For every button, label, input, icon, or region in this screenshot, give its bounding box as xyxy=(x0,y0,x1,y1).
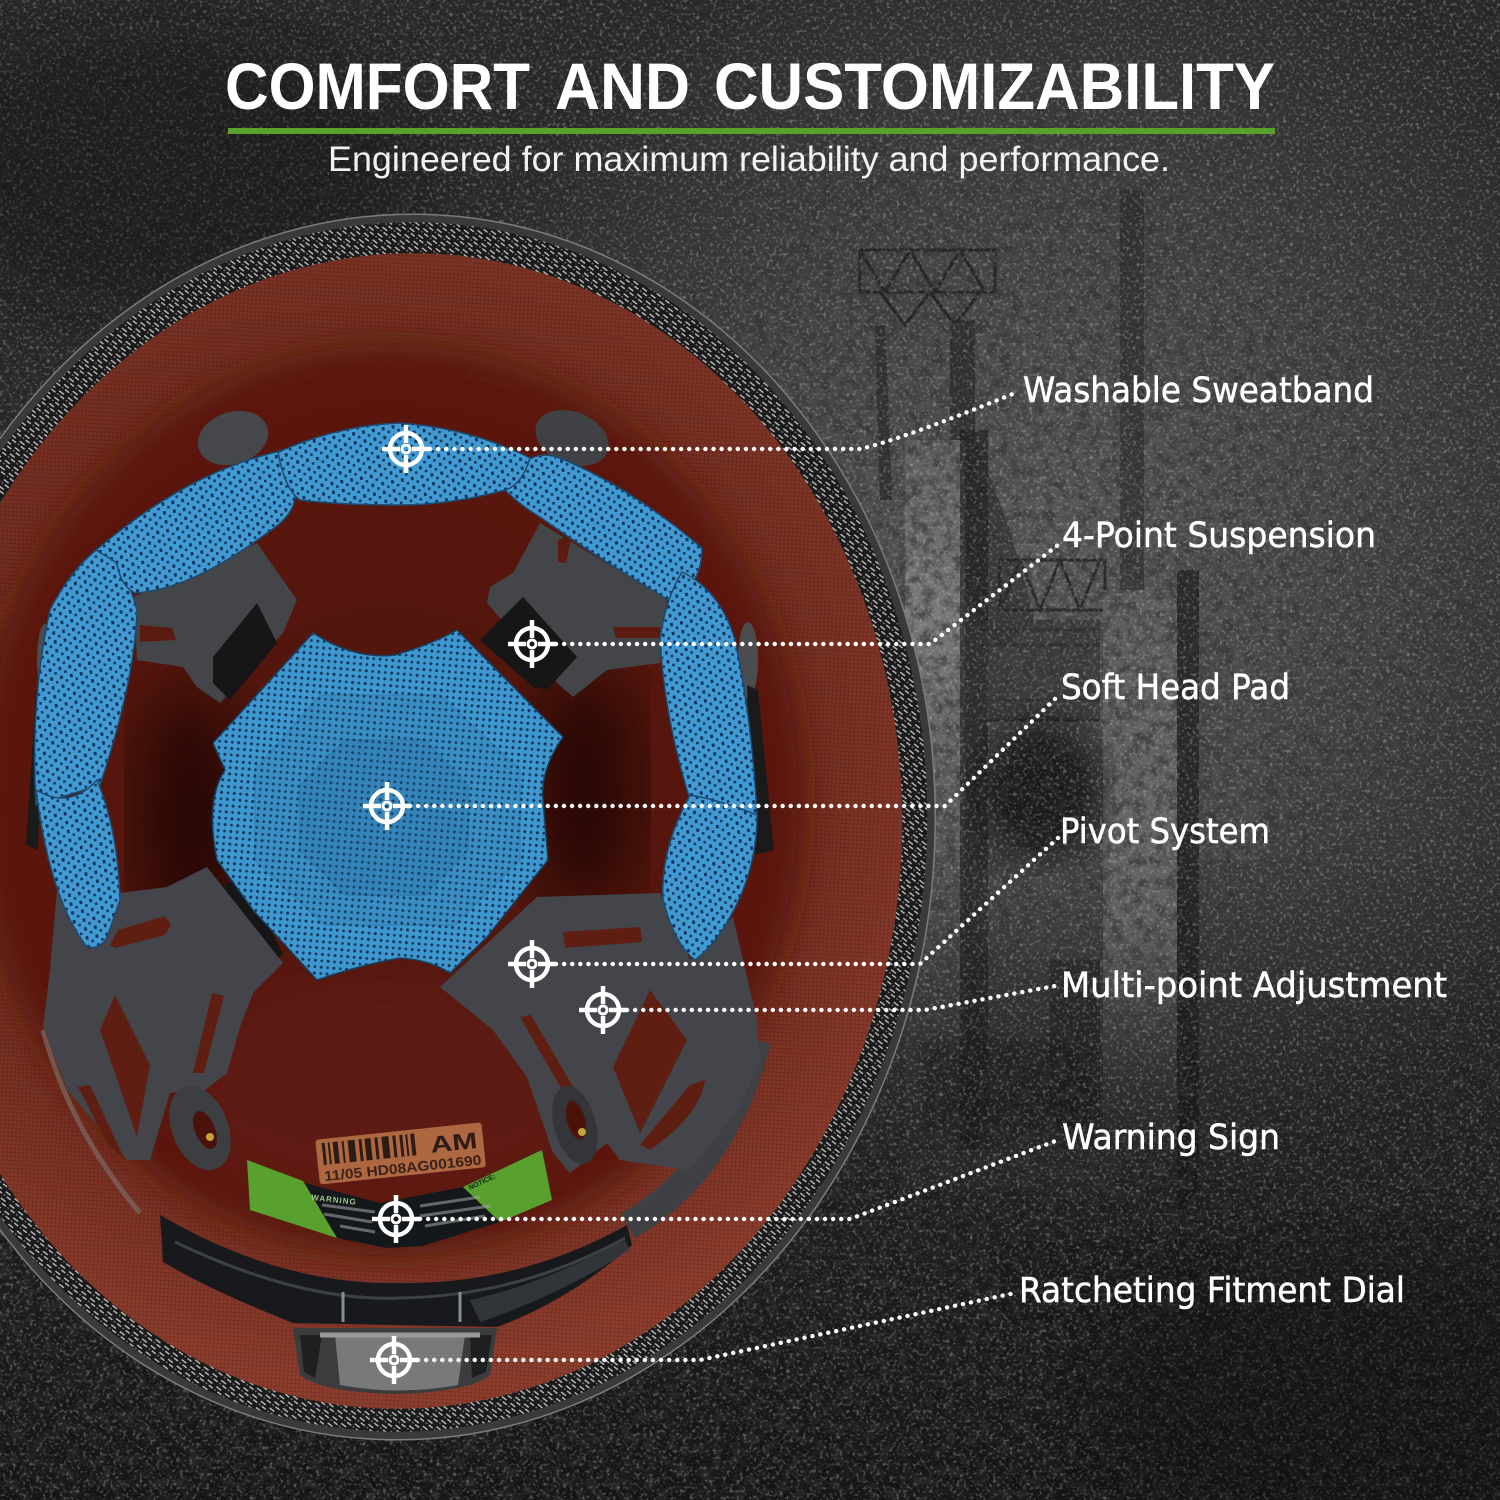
sweatband: upper right pad xyxy=(505,455,702,602)
label: Washable Sweatband: Washable Sweatband xyxy=(1023,371,1374,411)
helmet: black velcro side tabs xyxy=(26,685,774,855)
sweatband: lower right pad xyxy=(663,795,757,960)
target marker: pivot xyxy=(508,940,556,988)
helmet: outer braided brim xyxy=(0,187,966,1467)
helmet: green and black warning sticker: NOTICE: xyxy=(468,1173,497,1192)
helmet: red fiber inner shell xyxy=(0,228,932,1434)
helmet: barcode label: AM xyxy=(429,1127,479,1158)
helmet: blue mesh sweatband xyxy=(35,423,757,960)
helmet: barcode label: 11/05 HD08AG001690 xyxy=(323,1152,482,1184)
sweatband: left vertical pad xyxy=(35,547,137,805)
helmet: lower right suspension frame xyxy=(440,893,760,1226)
target marker: adjustment xyxy=(579,986,627,1034)
label: Soft Head Pad: Soft Head Pad xyxy=(1061,668,1290,708)
sweatband: top pad xyxy=(278,423,530,505)
helmet: suspension slots xyxy=(140,535,660,642)
sweatband: right vertical pad xyxy=(660,572,757,815)
helmet: barcode label xyxy=(315,1122,486,1185)
target marker: warning sign xyxy=(372,1195,420,1243)
helmet: upper left suspension arm xyxy=(133,543,297,703)
title: COMFORT xyxy=(225,49,530,123)
label: Pivot System: Pivot System xyxy=(1060,812,1270,852)
title: CUSTOMIZABILITY xyxy=(714,49,1275,123)
helmet: gray suspension lugs xyxy=(37,400,758,698)
target marker: suspension xyxy=(508,620,556,668)
callout leader lines xyxy=(410,393,1058,1360)
label: Multi-point Adjustment: Multi-point Adjustment xyxy=(1061,966,1447,1006)
label: 4-Point Suspension: 4-Point Suspension xyxy=(1062,516,1376,556)
target marker: head pad xyxy=(363,782,411,830)
sweatband: upper left pad xyxy=(96,450,295,593)
helmet: black webbing straps xyxy=(212,597,577,990)
label: Ratcheting Fitment Dial: Ratcheting Fitment Dial xyxy=(1019,1271,1405,1311)
target marker: dial xyxy=(370,1336,418,1384)
helmet: green and black warning sticker: WARNING xyxy=(311,1193,357,1207)
helmet: black rear headband xyxy=(160,1215,632,1327)
helmet: lower left suspension frame xyxy=(43,867,283,1213)
title: AND xyxy=(555,49,690,123)
helmet: green and black warning sticker xyxy=(247,1150,552,1248)
helmet: upper right suspension arm xyxy=(487,523,667,697)
label: Warning Sign: Warning Sign xyxy=(1062,1118,1280,1158)
helmet xyxy=(0,187,966,1467)
title underline xyxy=(228,128,1275,134)
target marker: sweatband xyxy=(382,425,430,473)
helmet: ratcheting fitment dial xyxy=(293,1328,497,1394)
helmet: blue mesh soft head pad xyxy=(212,630,563,980)
sweatband: lower left pad xyxy=(36,780,120,948)
subtitle: Engineered for maximum reliability and performance. xyxy=(328,140,1170,179)
